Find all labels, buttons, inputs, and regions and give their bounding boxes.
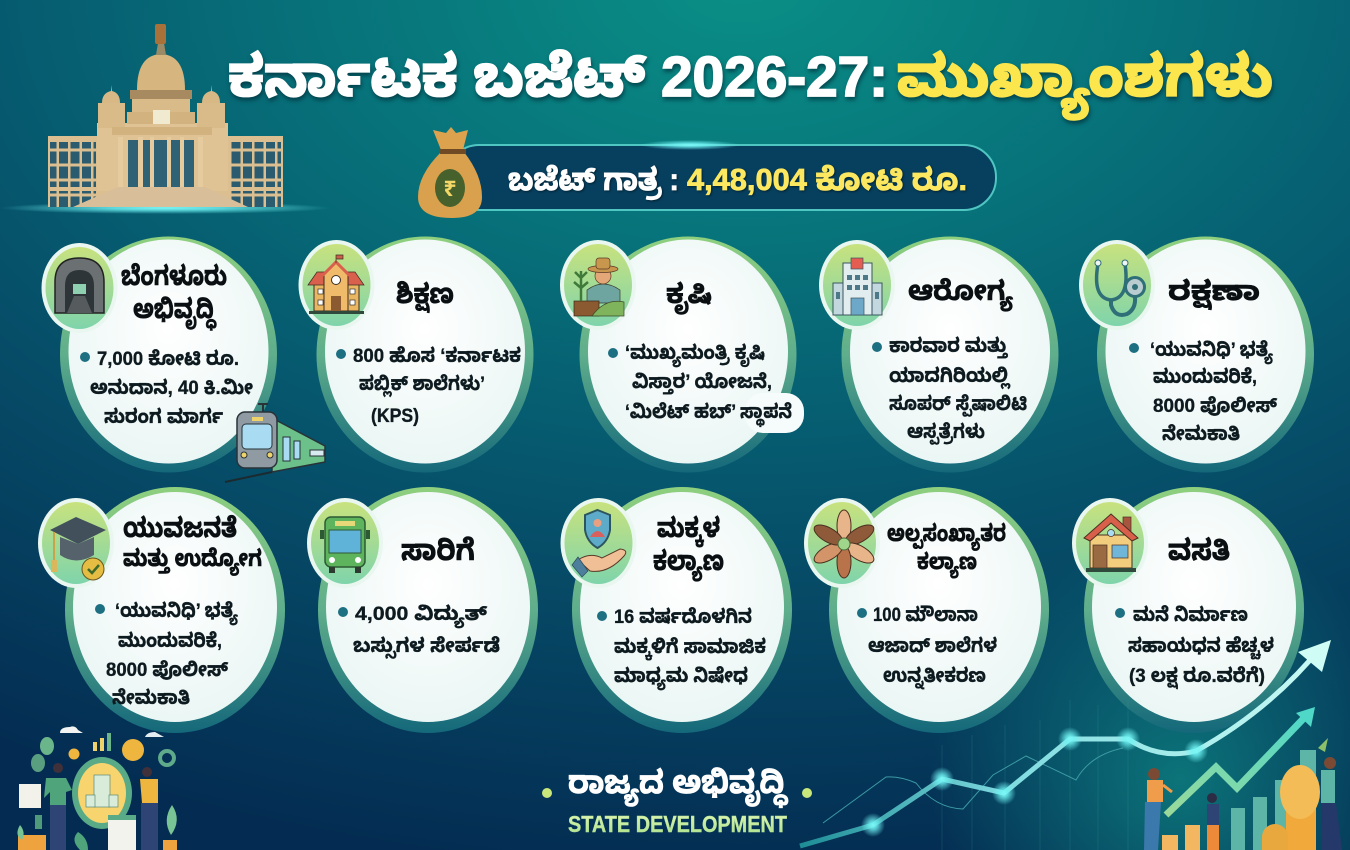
text: Minority detail [857, 604, 997, 690]
heading: Youth: ಯುವಜನತೆ [123, 513, 237, 543]
text: Agriculture detail: ‘ಮುಖ್ಯಮಂತ್ರಿ ಕೃಷಿ [625, 342, 765, 368]
icon: joined hands [804, 498, 880, 588]
heading: Minority welfare [887, 520, 1006, 579]
text: Agriculture detail [608, 342, 792, 428]
text: Health detail: ಸೂಪರ್ ಸ್ಪೆಷಾಲಿಟಿ [889, 393, 1027, 417]
text: Home detail: 8000 ಪೊಲೀಸ್ [1153, 395, 1278, 417]
icon: hospital [819, 240, 895, 330]
text: Health detail: ಕಾರವಾರ ಮತ್ತು [889, 335, 1008, 359]
title [228, 45, 1273, 120]
illustration: bottom-left people and finance [17, 726, 177, 850]
title: ಮುಖ್ಯಾಂಶಗಳು [897, 45, 1273, 120]
text: Child welfare detail: ಮಕ್ಕಳಿಗೆ ಸಾಮಾಜಿಕ [614, 636, 766, 661]
text: Housing detail: (3 ಲಕ್ಷ ರೂ.ವರೆಗೆ) [1129, 665, 1265, 690]
text: Youth detail: ‘ಯುವನಿಧಿ’ ಭತ್ಯೆ [115, 600, 238, 626]
text: Transport detail: 4,000 ವಿದ್ಯುತ್ [355, 603, 488, 629]
icon: farmer [560, 240, 636, 330]
heading: Child welfare [653, 513, 724, 582]
panel: Home [1079, 236, 1314, 472]
icon: money bag: ₹ [444, 176, 456, 201]
icon: house [1072, 498, 1148, 588]
text: Education detail: ಪಬ್ಲಿಕ್ ಶಾಲೆಗಳು’ [359, 373, 485, 398]
text: Housing detail: ಸಹಾಯಧನ ಹೆಚ್ಚಳ [1128, 635, 1274, 660]
icon: bus [307, 498, 383, 588]
heading: Agriculture: ಕೃಷಿ [666, 279, 712, 314]
text: Education detail: 800 ಹೊಸ ‘ಕರ್ನಾಟಕ [353, 345, 521, 367]
icon: metro train [225, 404, 325, 482]
budget text [508, 162, 967, 200]
text: Bengaluru detail: ಸುರಂಗ ಮಾರ್ಗ [104, 406, 223, 428]
heading: Youth [123, 513, 262, 576]
budget text: ಬಜೆಟ್ ಗಾತ್ರ : [508, 162, 679, 200]
text: Home detail: ‘ಯುವನಿಧಿ’ ಭತ್ಯೆ [1150, 339, 1273, 365]
panel: Bengaluru [42, 236, 325, 482]
text: Agriculture detail: ‘ಮಿಲೆಟ್ ಹಬ್’ ಸ್ಥಾಪನೆ [625, 401, 792, 428]
panel: Health [819, 236, 1058, 472]
text: Minority detail: ಆಜಾದ್ ಶಾಲೆಗಳ [868, 635, 997, 657]
heading: Minority welfare: ಕಲ್ಯಾಣ [917, 549, 977, 579]
text: Youth detail [95, 600, 238, 709]
panel: Agriculture [560, 236, 804, 472]
footer label: state development: STATE DEVELOPMENT [568, 811, 787, 837]
icon: shield and hand [560, 498, 636, 588]
text: Home detail: ಮುಂದುವರಿಕೆ, [1153, 366, 1257, 388]
icon: money bag [418, 127, 482, 218]
text: Health detail: ಆಸ್ಪತ್ರೆಗಳು [907, 421, 985, 445]
text: Housing detail: ಮನೆ ನಿರ್ಮಾಣ [1133, 604, 1248, 626]
text: Agriculture detail: ವಿಸ್ತಾರ’ ಯೋಜನೆ, [632, 371, 772, 395]
panel: Education [298, 236, 534, 472]
heading: Bengaluru: ಬೆಂಗಳೂರು [121, 261, 227, 291]
heading: Bengaluru [121, 261, 227, 331]
icon: school [298, 240, 374, 330]
panel: Minority welfare [804, 487, 1049, 733]
heading: Education: ಶಿಕ್ಷಣ [396, 279, 454, 313]
icon: tunnel [42, 243, 118, 333]
icon: stethoscope [1079, 240, 1155, 330]
text: Education detail [336, 345, 521, 427]
text: Housing detail [1115, 604, 1274, 690]
heading: Health: ಆರೋಗ್ಯ [908, 276, 1013, 312]
text: Transport detail [338, 603, 500, 659]
chart: rising growth line [800, 640, 1331, 850]
title: ಕರ್ನಾಟಕ ಬಜೆಟ್ 2026-27: [228, 45, 888, 109]
panel: Child welfare [560, 487, 792, 733]
text: Minority detail: 100 ಮೌಲಾನಾ [873, 604, 978, 626]
footer label: state development [295, 764, 1010, 837]
heading: Minority welfare: ಅಲ್ಪಸಂಖ್ಯಾತರ [887, 520, 1006, 551]
heading: Transport: ಸಾರಿಗೆ [401, 535, 475, 567]
text: Bengaluru detail [80, 348, 253, 428]
footer label: state development: ರಾಜ್ಯದ ಅಭಿವೃದ್ಧಿ [568, 764, 788, 808]
heading: Child welfare: ಮಕ್ಕಳ [657, 513, 720, 548]
budget text: 4,48,004 ಕೋಟಿ ರೂ. [687, 162, 967, 197]
panel: Housing [1072, 487, 1304, 733]
heading: Bengaluru: ಅಭಿವೃದ್ಧಿ [133, 294, 217, 331]
heading: Home: ರಕ್ಷಣಾ [1168, 276, 1260, 310]
text: Home detail: ನೇಮಕಾತಿ [1162, 423, 1240, 445]
heading: Child welfare: ಕಲ್ಯಾಣ [653, 546, 724, 582]
heading: Housing: ವಸತಿ [1168, 535, 1230, 567]
panel: Transport [307, 487, 538, 733]
heading: Youth: ಮತ್ತು ಉದ್ಯೋಗ [123, 545, 262, 576]
text: Bengaluru detail: ಅನುದಾನ, 40 ಕಿ.ಮೀ [90, 377, 253, 399]
text: Child welfare detail: ಮಾಧ್ಯಮ ನಿಷೇಧ [614, 665, 748, 691]
text: Youth detail: ಮುಂದುವರಿಕೆ, [118, 630, 222, 652]
text: Youth detail: 8000 ಪೊಲೀಸ್ [106, 659, 229, 681]
text: Health detail [872, 335, 1027, 445]
budget banner [418, 127, 996, 218]
text: Transport detail: ಬಸ್ಸುಗಳ ಸೇರ್ಪಡೆ [353, 635, 500, 659]
text: Education detail: (KPS) [371, 405, 419, 427]
illustration: bottom-right growth bars and people [1144, 707, 1342, 850]
panel: Youth [38, 487, 285, 733]
icon: Vidhana Soudha building [0, 24, 330, 214]
text: Child welfare detail: 16 ವರ್ಷದೊಳಗಿನ [614, 606, 752, 628]
icon: graduation cap [38, 498, 114, 588]
text: Child welfare detail [597, 606, 766, 691]
text: Minority detail: ಉನ್ನತೀಕರಣ [883, 665, 986, 690]
text: Health detail: ಯಾದಗಿರಿಯಲ್ಲಿ [889, 365, 1011, 390]
text: Home detail [1129, 339, 1278, 445]
text: Bengaluru detail: 7,000 ಕೋಟಿ ರೂ. [97, 348, 239, 370]
text: Youth detail: ನೇಮಕಾತಿ [112, 687, 190, 709]
